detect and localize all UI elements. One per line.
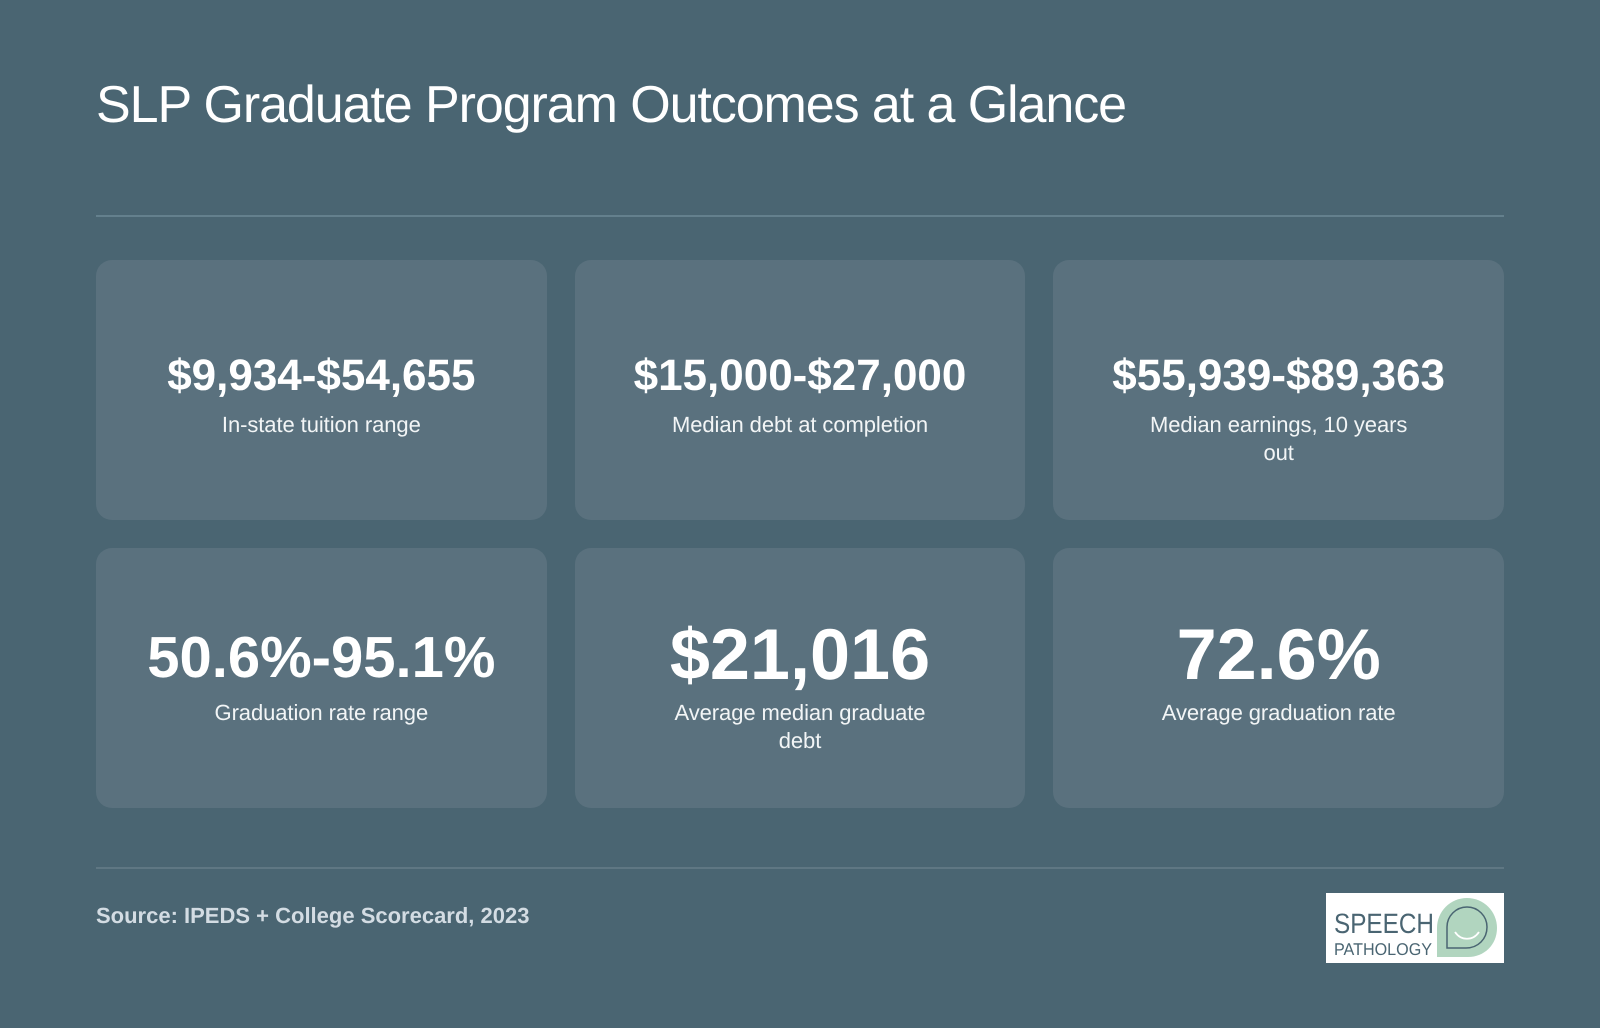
panel: earnings: [1053, 260, 1504, 520]
title: SLP Graduate Program Outcomes at a Glance: [96, 76, 1126, 134]
panel: earnings: Median earnings, 10 years out: [1150, 412, 1407, 465]
source: Source: IPEDS + College Scorecard, 2023: [96, 903, 529, 928]
panel: average debt: Average median graduate debt: [675, 700, 925, 753]
panel: tuition: $9,934-$54,655: [167, 351, 475, 400]
panel: debt: $15,000-$27,000: [634, 351, 966, 400]
panel: debt: Median debt at completion: [672, 412, 928, 437]
panel: graduation range: Graduation rate range: [215, 700, 428, 725]
panel: debt: [575, 260, 1025, 520]
panel: graduation range: [96, 548, 547, 808]
panel: average graduation: Average graduation rate: [1162, 700, 1396, 725]
panel: average debt: [575, 548, 1025, 808]
logo: PATHOLOGY: [1334, 940, 1432, 959]
panel: earnings: $55,939-$89,363: [1112, 351, 1445, 400]
panel: average debt: $21,016: [670, 615, 930, 695]
panel: tuition: [96, 260, 547, 520]
panel: average graduation: [1053, 548, 1504, 808]
panel: tuition: In-state tuition range: [222, 412, 421, 437]
panel: average graduation: 72.6%: [1177, 615, 1381, 695]
logo: SPEECH: [1334, 908, 1434, 939]
logo: [1326, 893, 1504, 963]
panel: graduation range: 50.6%-95.1%: [147, 625, 495, 690]
